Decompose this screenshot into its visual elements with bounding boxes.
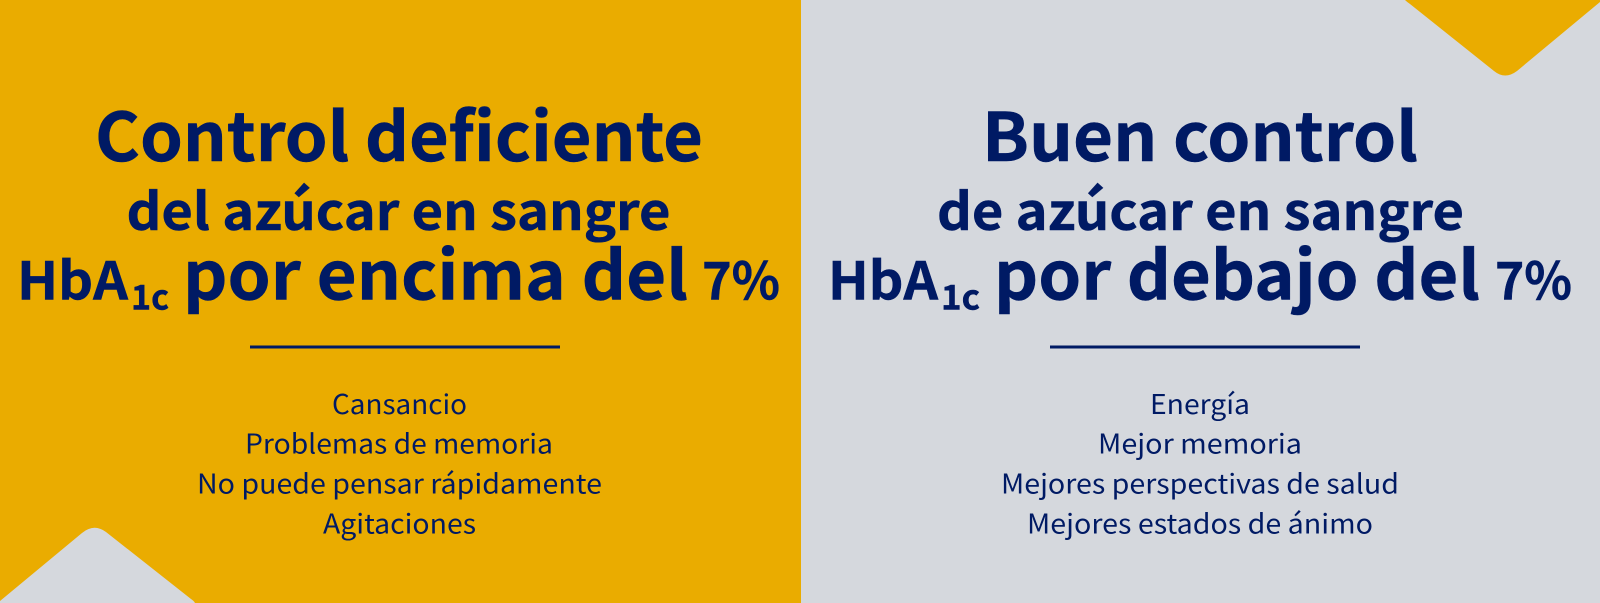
heading: poor control: Control deficiente <box>95 84 703 181</box>
decorative corner shape: bottom left <box>0 528 195 603</box>
benefit list: good control: Energía <box>1150 383 1250 422</box>
decorative corner shape: top right <box>1405 0 1600 76</box>
heading: poor control <box>17 84 780 320</box>
benefit list: good control: Mejores estados de ánimo <box>1027 502 1373 542</box>
heading: good control: 7% <box>1495 240 1572 314</box>
benefit list: good control <box>1001 383 1399 542</box>
heading: poor control: 7% <box>702 240 780 314</box>
heading: poor control: del azúcar en sangre <box>126 171 670 245</box>
heading: good control: 1c <box>941 270 980 320</box>
heading: poor control: HbA <box>17 240 129 314</box>
symptom list: poor control: Agitaciones <box>323 502 476 542</box>
heading: poor control: por encima del <box>183 222 688 320</box>
symptom list: poor control <box>197 383 602 542</box>
heading: good control: Buen control <box>982 84 1418 181</box>
heading: good control: HbA <box>828 240 939 314</box>
heading: good control <box>828 84 1572 320</box>
heading: good control: de azúcar en sangre <box>937 171 1464 245</box>
symptom list: poor control: Problemas de memoria <box>245 422 553 462</box>
benefit list: good control: Mejor memoria <box>1098 422 1302 462</box>
panel: good control <box>801 0 1600 603</box>
benefit list: good control: Mejores perspectivas de salud <box>1001 462 1399 502</box>
heading: good control: por debajo del <box>994 222 1480 320</box>
symptom list: poor control: No puede pensar rápidamente <box>197 462 602 502</box>
symptom list: poor control: Cansancio <box>332 383 467 422</box>
panel: poor control <box>0 0 801 603</box>
heading: poor control: 1c <box>131 270 169 320</box>
